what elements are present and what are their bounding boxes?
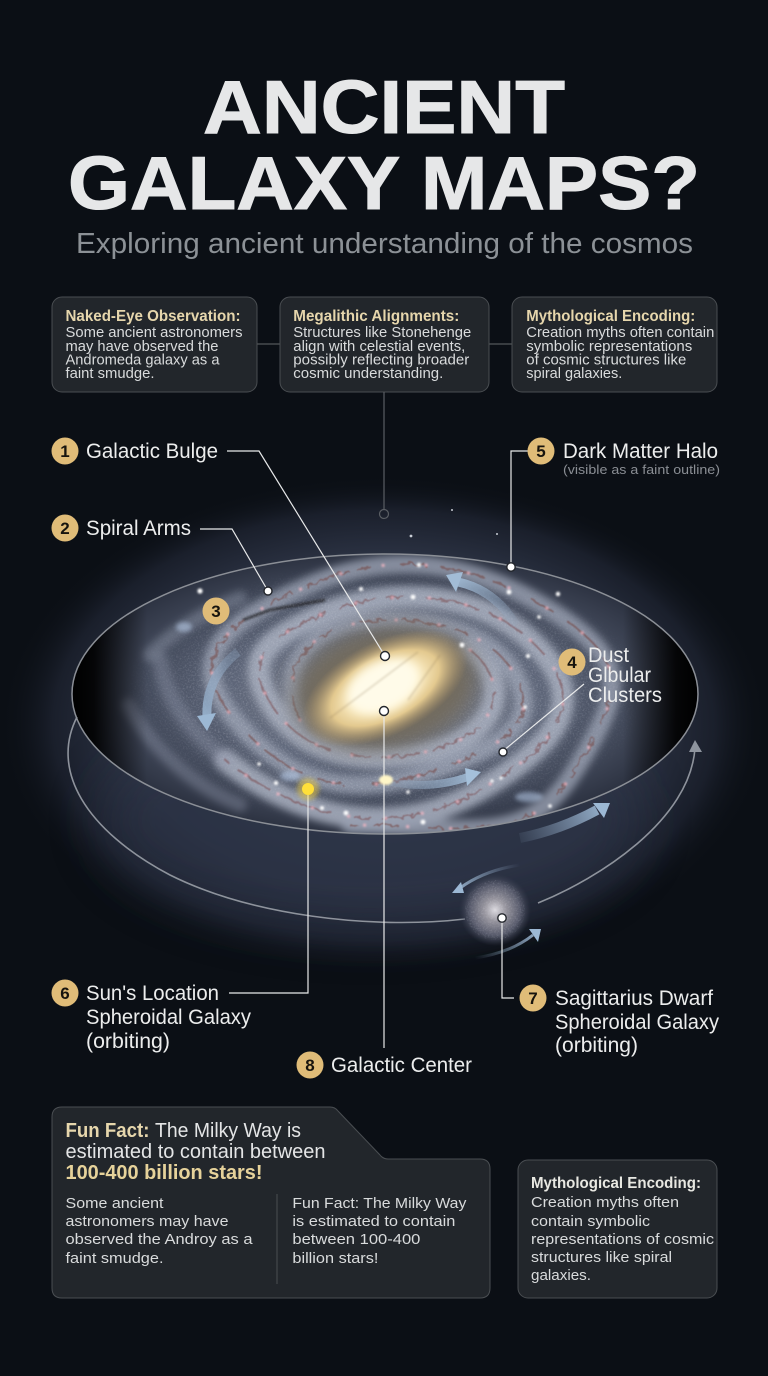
panel: mythological encoding (bottom): Creation myths often xyxy=(531,1194,679,1211)
panel: mythological encoding (bottom): contain symbolic xyxy=(531,1213,651,1230)
panel: fun fact: 100-400 billion stars! xyxy=(66,1162,262,1184)
panel: naked-eye observation: faint smudge. xyxy=(66,365,154,382)
galactic bulge xyxy=(283,605,487,771)
label 5: dark matter halo: 5 xyxy=(536,442,546,461)
panel: mythological encoding xyxy=(512,297,717,392)
panel: naked-eye observation: Andromeda galaxy as a xyxy=(66,352,220,368)
panel: mythological encoding (bottom): galaxies. xyxy=(531,1267,591,1284)
connector from panels to galaxy xyxy=(380,392,388,518)
orbit path xyxy=(68,717,702,922)
galactic disc xyxy=(72,554,698,834)
side shadow crescents xyxy=(72,608,698,780)
panel: naked-eye observation xyxy=(52,297,257,392)
label 6: sun's location: Spheroidal Galaxy xyxy=(86,1006,251,1029)
label 1: galactic bulge: 1 xyxy=(60,442,70,461)
dust lane top left xyxy=(243,600,325,620)
arrow: centre xyxy=(392,768,481,786)
label 3 xyxy=(202,598,230,624)
arrow: dwarf upper xyxy=(452,865,520,893)
title xyxy=(68,65,700,225)
label 4: dust and globular clusters: Clusters xyxy=(588,684,662,707)
label 2: spiral arms: 2 xyxy=(60,519,70,538)
panel: fun fact: is estimated to contain xyxy=(292,1213,455,1230)
label 5: dark matter halo: Dark Matter Halo xyxy=(563,440,718,463)
label 5: dark matter halo xyxy=(528,438,720,477)
panel: mythological encoding: symbolic representations xyxy=(526,338,692,355)
label 8: galactic center: Galactic Center xyxy=(331,1054,472,1077)
label 8: galactic center xyxy=(296,1052,472,1078)
panel: fun fact: observed the Androy as a xyxy=(66,1231,253,1248)
label 6: sun's location: 6 xyxy=(60,984,70,1003)
callout dots xyxy=(264,563,515,922)
panel: mythological encoding (bottom) xyxy=(518,1160,717,1298)
dust lanes xyxy=(212,564,612,829)
panel: mythological encoding (bottom): Mythological Encoding: xyxy=(531,1175,701,1192)
title: ANCIENT xyxy=(203,65,565,149)
panel: mythological encoding: Mythological Encoding: xyxy=(526,308,695,325)
label 6: sun's location: (orbiting) xyxy=(86,1030,170,1053)
grain xyxy=(146,576,622,810)
panel: megalithic alignments: cosmic understanding. xyxy=(293,365,443,382)
label 2: spiral arms: Spiral Arms xyxy=(86,517,191,540)
arrow: left xyxy=(197,652,238,731)
panel: megalithic alignments: Structures like Stonehenge xyxy=(293,324,471,341)
panel: naked-eye observation: may have observed the xyxy=(66,338,218,355)
panel: naked-eye observation: Naked-Eye Observation: xyxy=(66,308,240,325)
panel: fun fact: The Milky Way is xyxy=(155,1120,301,1142)
label 4: dust and globular clusters: Glbular xyxy=(588,664,651,687)
panel: fun fact: between 100-400 xyxy=(292,1231,420,1248)
panel: fun fact xyxy=(52,1107,490,1298)
disc outline xyxy=(72,554,698,834)
label 4: dust and globular clusters: Dust xyxy=(588,644,629,667)
spiral arms xyxy=(128,564,612,829)
panel: fun fact: estimated to contain between xyxy=(66,1141,326,1163)
panel: mythological encoding: Creation myths often contain xyxy=(526,324,714,341)
bright stars xyxy=(197,563,560,824)
sun marker xyxy=(297,778,319,800)
panel: mythological encoding: of cosmic structures like xyxy=(526,352,686,368)
panel: fun fact: billion stars! xyxy=(292,1250,378,1267)
label 2: spiral arms xyxy=(52,514,191,542)
label 7: sagittarius dwarf: (orbiting) xyxy=(555,1034,638,1057)
label 5: dark matter halo: (visible as a faint outline) xyxy=(563,462,720,477)
panel: mythological encoding (bottom): representations of cosmic xyxy=(531,1231,715,1248)
label 1: galactic bulge xyxy=(52,438,218,464)
label 4: dust and globular clusters xyxy=(558,644,662,707)
panel: fun fact: astronomers may have xyxy=(66,1213,228,1230)
label 8: galactic center: 8 xyxy=(305,1056,315,1075)
panel: megalithic alignments: Megalithic Alignments: xyxy=(293,308,459,325)
panel: fun fact: Fun Fact: The Milky Way xyxy=(292,1195,467,1212)
label 6: sun's location: Sun's Location xyxy=(86,982,219,1005)
blue star clusters xyxy=(176,622,543,802)
panel: megalithic alignments: align with celestial events, xyxy=(293,338,465,355)
galaxy illustration xyxy=(32,496,736,958)
panel: mythological encoding: spiral galaxies. xyxy=(526,365,622,382)
rotation arrows xyxy=(197,572,610,958)
label 7: sagittarius dwarf: Spheroidal Galaxy xyxy=(555,1011,719,1034)
label 4: dust and globular clusters: 4 xyxy=(567,653,577,672)
arrow: dwarf lower xyxy=(475,929,541,958)
label 1: galactic bulge: Galactic Bulge xyxy=(86,440,218,463)
label 7: sagittarius dwarf: 7 xyxy=(528,989,538,1008)
label 6: sun's location xyxy=(52,980,251,1053)
panel: mythological encoding (bottom): structures like spiral xyxy=(531,1249,672,1266)
panel: fun fact: Fun Fact: xyxy=(66,1120,150,1142)
label 7: sagittarius dwarf: Sagittarius Dwarf xyxy=(555,987,713,1010)
dwarf galaxy xyxy=(462,878,528,944)
title: GALAXY MAPS? xyxy=(68,141,700,225)
arrow: top right xyxy=(446,572,516,625)
panel: fun fact: faint smudge. xyxy=(66,1250,164,1267)
panel: naked-eye observation: Some ancient astronomers xyxy=(66,324,242,341)
panel: megalithic alignments: possibly reflecting broader xyxy=(293,352,469,368)
dark matter halo glow xyxy=(0,475,768,975)
faint stars above disc xyxy=(410,509,498,537)
arrow: below disc xyxy=(520,803,610,838)
star near centre xyxy=(379,775,393,785)
panel: megalithic alignments xyxy=(280,297,489,392)
subtitle: Exploring ancient understanding of the cosmos xyxy=(76,228,693,260)
label 3: 3 xyxy=(211,602,221,621)
callout lines xyxy=(200,451,584,1048)
panel: fun fact: Some ancient xyxy=(66,1195,164,1212)
lower glow xyxy=(100,710,640,930)
label 7: sagittarius dwarf xyxy=(520,984,719,1057)
pink star-forming knots xyxy=(212,564,612,829)
top info panels xyxy=(52,297,717,392)
